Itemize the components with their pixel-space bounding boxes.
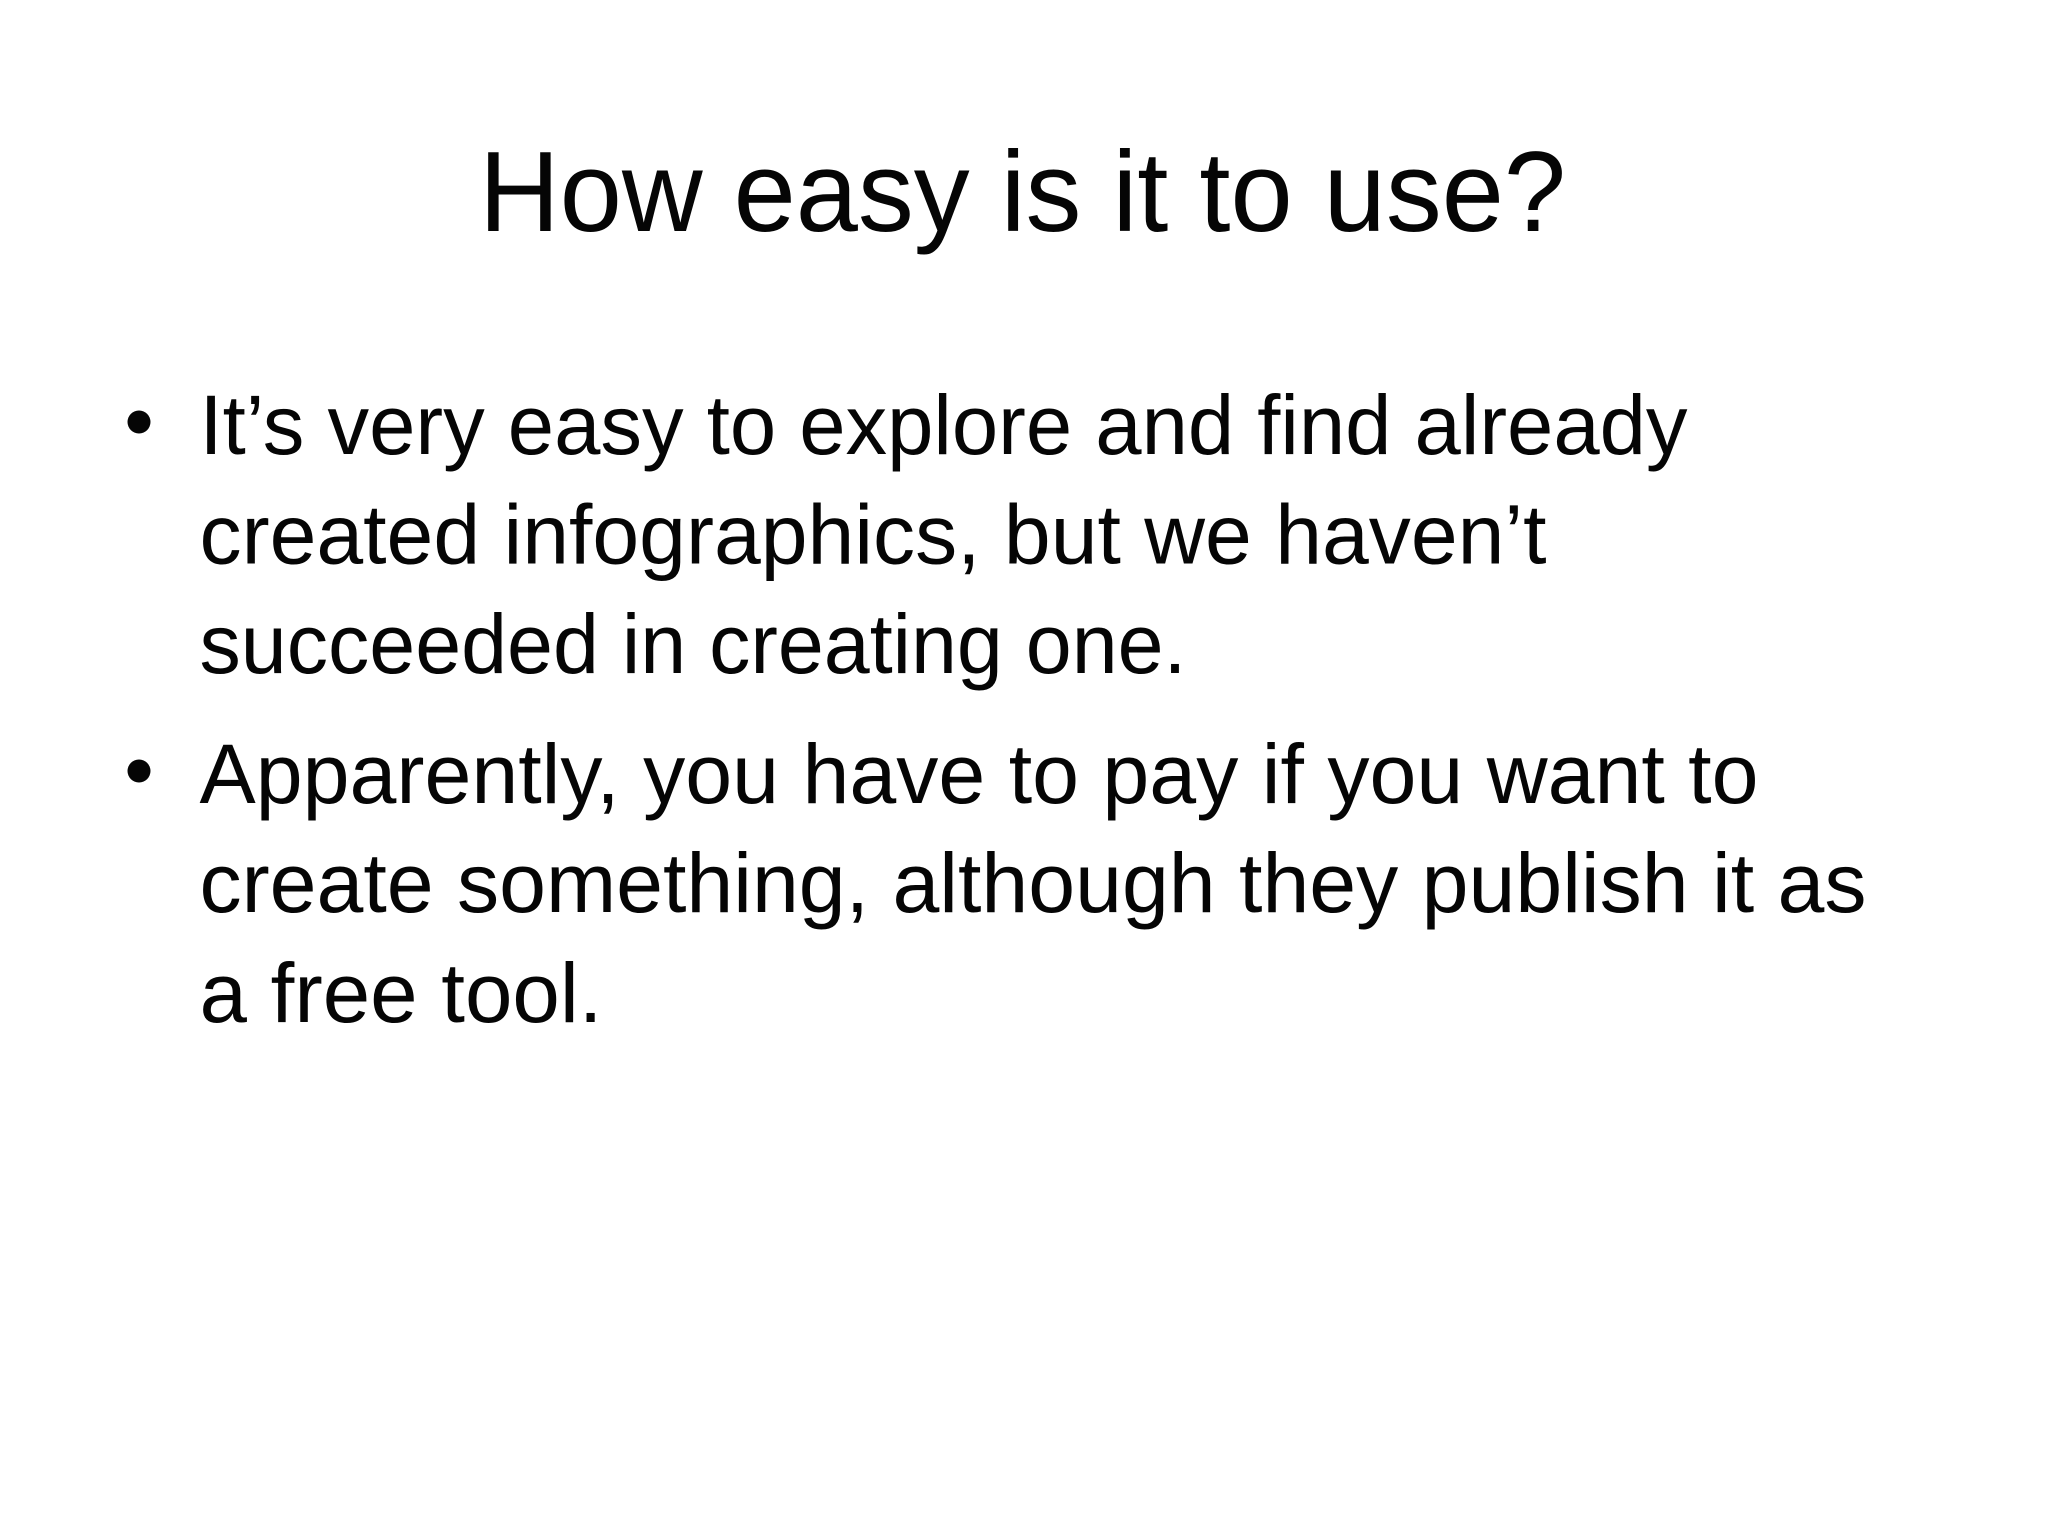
title: How easy is it to use? xyxy=(479,129,1566,256)
text block: second bullet: create something, although they publish it as xyxy=(200,836,1866,930)
text block: first bullet: It’s very easy to explore and find already xyxy=(200,378,1688,472)
text block: first bullet: succeeded in creating one. xyxy=(200,597,1186,691)
text block: second bullet: a free tool. xyxy=(200,946,602,1040)
text block: first bullet: created infographics, but we haven’t xyxy=(200,488,1546,582)
text block: second bullet: Apparently, you have to pay if you want to xyxy=(200,727,1758,821)
icon: bullet dot xyxy=(128,760,150,782)
bullet list xyxy=(128,378,1866,1040)
bullet item: paying to create xyxy=(128,727,1866,1040)
icon: bullet dot xyxy=(128,410,150,434)
bullet item: exploring is easy, creating failed xyxy=(128,378,1688,691)
text block: second bullet xyxy=(200,727,1866,1040)
text block: first bullet xyxy=(200,378,1688,691)
